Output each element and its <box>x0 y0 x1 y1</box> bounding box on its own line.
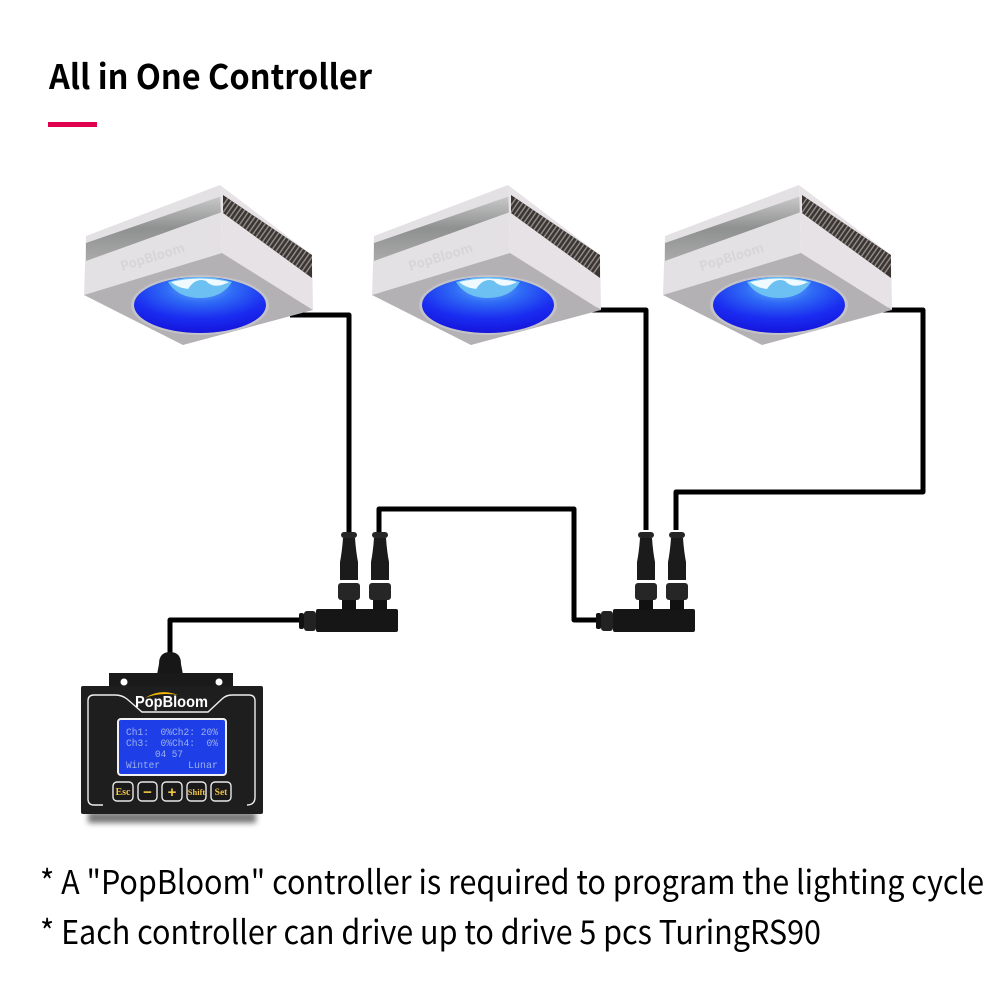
controller shadow <box>88 812 256 823</box>
controller body <box>81 686 263 814</box>
controller logo <box>145 692 178 698</box>
title: All in One Controller <box>48 50 372 99</box>
controller button labels <box>116 784 228 801</box>
note: controller capacity: * Each controller can drive up to drive 5 pcs TuringRS90 <box>40 906 821 954</box>
controller button labels: − <box>143 784 152 801</box>
controller buttons <box>113 782 231 801</box>
light fixture 2 <box>372 185 601 345</box>
controller LCD screen <box>118 719 226 775</box>
controller <box>81 652 263 823</box>
controller LCD screen: Ch3: 0%Ch4: 0% <box>126 738 219 750</box>
title accent bar <box>48 122 97 127</box>
controller LCD screen: Ch1: 0%Ch2: 20% <box>126 727 219 739</box>
light fixture 3 <box>663 185 892 345</box>
controller button labels: Shift <box>188 787 205 797</box>
cable network <box>170 310 923 656</box>
controller button labels: + <box>168 784 177 801</box>
controller mounting tab <box>109 673 233 690</box>
controller LCD screen: 04 57 <box>155 749 183 761</box>
controller button labels: Set <box>215 788 228 798</box>
controller: PopBloom <box>135 694 208 711</box>
T connector 2 <box>596 532 695 632</box>
light fixture 1 <box>84 185 313 345</box>
controller button labels: Esc <box>116 787 131 798</box>
T connector 1 <box>299 532 398 632</box>
controller LCD screen: Lunar <box>188 760 218 772</box>
controller cable gland <box>156 652 184 680</box>
controller LCD screen: Winter <box>126 760 160 772</box>
